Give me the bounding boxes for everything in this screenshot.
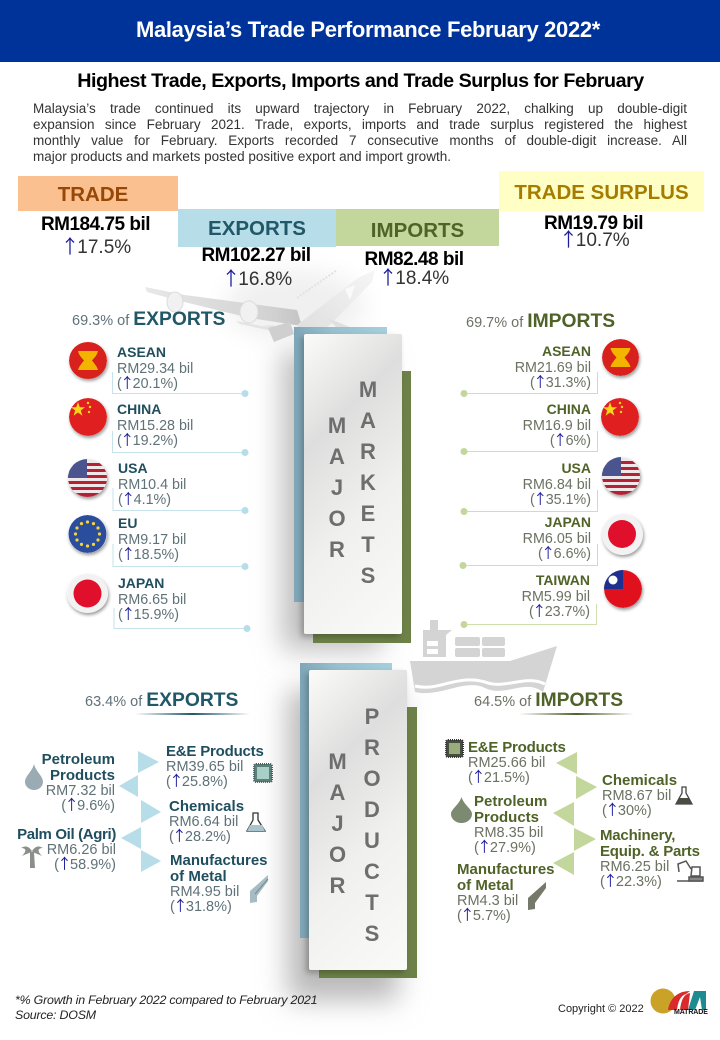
text: major: M A J O R [328,748,347,898]
heading: exports products: 63.4% of EXPORTS [85,690,238,711]
product exports: Palm oil: RM6.26 bil [47,842,116,858]
market Japan exports: (↑15.9%) [118,603,179,624]
logo wordmark: MATRADE [674,1009,708,1016]
product imports: Metal: (↑5.7%) [457,904,511,924]
product exports: Petroleum: Products [50,766,115,784]
market USA imports [523,460,591,509]
product imports: Machinery: Equip. & Parts [600,842,700,860]
market China exports [117,401,193,450]
heading: exports markets: 69.3% of EXPORTS [72,309,225,330]
imports value: RM82.48 bil [364,249,464,270]
market USA exports: RM10.4 bil [118,476,186,492]
product exports: Metal: RM4.95 bil [170,884,239,900]
product imports: Petroleum [474,792,547,856]
market EU exports: RM9.17 bil [118,532,186,548]
product imports: E&E: (↑21.5%) [468,766,530,786]
exports heading: EXPORTS [208,217,306,240]
icon: flag EU exports [68,515,107,553]
heading: imports markets: 69.7% of IMPORTS [466,311,615,332]
icon: MATRADE logo [650,988,710,1020]
KPI: trade surplus [499,171,704,252]
trade heading: TRADE [58,183,128,206]
icon: palm tree [21,846,43,868]
heading: imports products: 64.5% of IMPORTS [474,690,623,711]
product imports: Chemicals: RM8.67 bil [602,788,671,804]
icon: oil drop exports [25,764,43,790]
product imports: Metal: of Metal [457,876,514,894]
market China imports [523,401,591,450]
market Japan imports: RM6.05 bil [523,530,591,546]
product imports: Metal [457,860,555,924]
product imports: E&E [468,738,566,786]
intro text: expansion since February 2021. Trade, exports, imports and trade surplus registered the highest [33,117,687,132]
icon: cargo ship watermark [410,620,557,694]
imports heading [336,209,499,246]
product exports: Metal [170,852,268,916]
product imports: Petroleum: RM8.35 bil [474,824,543,840]
product exports: Chemicals: (↑28.2%) [169,825,231,846]
icon: steel beam imports [527,881,547,911]
market China exports: CHINA [117,401,161,417]
product imports: E&E: E&E Products [468,738,566,756]
icon: steel beam exports [249,874,269,904]
icon: flag China exports [69,398,107,436]
icon: flag USA exports [68,459,107,497]
KPI: trade [18,176,178,259]
market USA exports [118,460,186,509]
blue backing [300,663,392,938]
icon: airplane watermark [145,270,374,342]
product exports: Palm oil: (↑58.9%) [54,852,116,874]
icon: flag Japan exports [67,574,108,613]
product exports: Metal: of Metal [170,868,227,884]
icon: chip imports [445,739,464,758]
market Taiwan imports: (↑23.7%) [529,600,590,621]
footnote [15,992,317,1022]
market Taiwan imports: TAIWAN [536,572,590,588]
market ASEAN exports: RM29.34 bil [117,360,193,376]
title banner: Malaysia’s Trade Performance February 2022* [136,17,600,42]
product imports: Petroleum: Products [474,808,539,826]
footnote: Source: DOSM [15,1008,96,1022]
market USA imports: RM6.84 bil [523,476,591,492]
market Japan imports [523,514,591,563]
imports growth: ↑18.4% [379,263,449,290]
exports growth: ↑16.8% [222,264,292,291]
white card [309,670,407,970]
product imports: Metal: Manufactures [457,860,555,878]
product exports: Chemicals: Chemicals [169,798,244,815]
icon: flask imports [675,786,693,805]
market Japan exports: JAPAN [118,575,164,591]
product imports: Machinery: RM6.25 bil [600,858,669,874]
product exports: Palm oil [17,826,116,874]
market ASEAN exports: ASEAN [117,344,166,360]
surplus heading: TRADE SURPLUS [514,181,689,204]
product imports: Machinery: Machinery, [600,826,675,844]
product exports: Metal: (↑31.8%) [170,894,232,916]
product exports: Petroleum: Petroleum [42,750,115,768]
intro text [33,101,687,164]
copyright: Copyright © 2022 [558,1003,644,1015]
product exports: E&E: (↑25.8%) [166,770,228,791]
market ASEAN imports: RM21.69 bil [515,360,591,376]
icon: chip exports [253,763,273,783]
icon: flag China imports [601,398,639,436]
product exports: Chemicals [169,798,244,846]
surplus value: RM19.79 bil [544,213,643,234]
trade value: RM184.75 bil [41,214,150,235]
icon: flag ASEAN imports [602,339,639,376]
icon: flag Japan imports [602,514,643,555]
market Japan imports: JAPAN [545,514,591,530]
market Japan exports: RM6.65 bil [118,592,186,608]
market Japan exports [118,575,186,624]
market Taiwan imports: RM5.99 bil [522,588,590,604]
product imports: E&E: RM25.66 bil [468,754,545,770]
market EU exports: EU [118,515,137,531]
market Taiwan imports [522,572,590,621]
product exports: Metal: Manufactures [170,852,268,868]
product imports: Petroleum: Petroleum [474,792,547,810]
icon: oil drop imports [451,797,472,823]
intro text: monthly value for February. Exports recorded 7 consecutive months of double-digit increase. All [33,133,687,148]
KPI: exports [178,209,336,291]
icon: flag Taiwan imports [604,570,642,608]
market ASEAN exports: (↑20.1%) [117,372,178,393]
product imports: Chemicals: (↑30%) [602,798,652,820]
market ASEAN imports: (↑31.3%) [530,371,591,392]
product exports: Petroleum: RM7.32 bil [46,782,115,798]
market USA imports: USA [561,460,591,476]
icon: flask exports [246,812,266,832]
exports heading [178,209,336,247]
trade heading [18,176,178,211]
product exports: E&E: E&E Products [166,743,264,760]
exports value: RM102.27 bil [201,245,311,266]
product imports: Chemicals: Chemicals [602,772,677,788]
text: major: M A J O R [328,412,346,562]
product imports: Machinery [600,826,700,890]
green backing [319,707,417,978]
imports heading: IMPORTS [371,219,464,242]
market China imports: RM16.9 bil [523,418,591,434]
product exports: Chemicals: RM6.64 bil [169,814,238,830]
intro text: Malaysia’s trade continued its upward trajectory in February 2022, chalking up double-digit [33,101,687,116]
subtitle: Highest Trade, Exports, Imports and Trade Surplus for February [77,70,644,92]
product imports: Petroleum: (↑27.9%) [474,836,536,856]
market China exports: (↑19.2%) [117,429,178,450]
title banner [0,0,720,62]
trade growth: ↑17.5% [61,232,131,259]
market EU exports: (↑18.5%) [118,543,179,564]
icon: excavator [676,859,704,883]
white card [304,334,402,634]
panel: major products [300,663,417,978]
market USA exports: USA [118,460,148,476]
market USA imports: (↑35.1%) [530,488,591,509]
market ASEAN imports: ASEAN [542,343,591,359]
market ASEAN imports [515,343,591,392]
green backing [313,371,411,643]
surplus heading [499,171,704,211]
market China imports: (↑6%) [550,429,591,450]
icon: flag ASEAN exports [69,342,107,379]
product exports: E&E: RM39.65 bil [166,759,243,775]
blue backing [294,327,387,602]
product exports: Petroleum: (↑9.6%) [61,794,115,814]
icon: flag USA imports [602,457,640,495]
panel: major markets [294,327,411,643]
surplus growth: ↑10.7% [559,225,630,252]
market ASEAN exports [117,344,193,393]
market China exports: RM15.28 bil [117,418,193,434]
market EU exports [118,515,186,564]
KPI: imports [336,209,499,290]
market China imports: CHINA [547,401,591,417]
product imports: Chemicals [602,772,677,820]
product exports: Petroleum [42,750,115,814]
text: markets: M A R K E T S [359,376,377,588]
text: products: P R O D U C T S [363,704,381,946]
product imports: Metal: RM4.3 bil [457,892,518,908]
product exports: E&E [166,743,264,791]
intro text: major products and markets posted positive export and import growth. [33,149,451,164]
market USA exports: (↑4.1%) [118,488,171,509]
product imports: Machinery: (↑22.3%) [600,870,662,890]
market Japan imports: (↑6.6%) [538,542,591,563]
product exports: Palm oil: Palm Oil (Agri) [17,826,116,842]
footnote: *% Growth in February 2022 compared to February 2021 [15,992,317,1006]
